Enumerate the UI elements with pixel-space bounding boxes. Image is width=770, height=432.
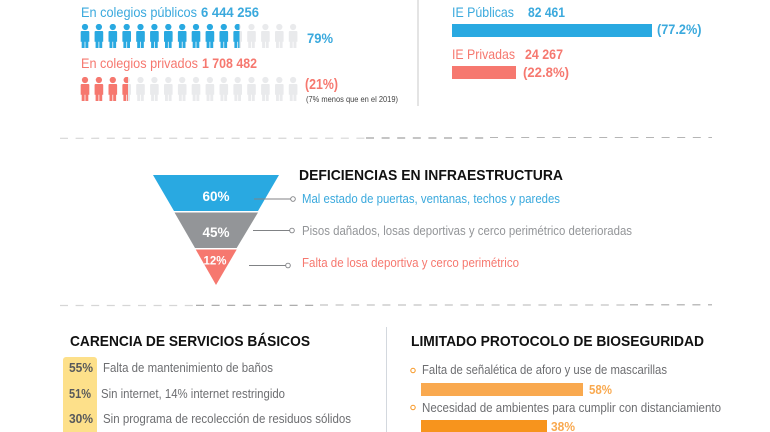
label: private institutions: 24 267 (525, 47, 563, 62)
bar: private institutions (452, 66, 516, 79)
panel: students by school type (81, 5, 398, 104)
pictogram: public schools 79% (81, 24, 297, 48)
value: 21%: (21%) (305, 77, 338, 93)
funnel segment: 45%: 45% (202, 225, 230, 240)
funnel segment: 12%: 12% (203, 256, 227, 268)
label: private schools students: 1 708 482 (202, 56, 257, 72)
label: private schools students: En colegios privados (81, 56, 198, 72)
highlight column (63, 357, 97, 432)
label: public schools students: 6 444 256 (201, 5, 259, 21)
item: distancing: Necesidad de ambientes para cumplir con distanciamiento (422, 400, 721, 415)
value: 79%: 79% (307, 30, 334, 46)
funnel segment: 60%: 60% (202, 189, 230, 204)
heading: infrastructure deficiencies: DEFICIENCIAS EN INFRAESTRUCTURA (299, 167, 563, 184)
label: private institutions: IE Privadas (452, 47, 515, 62)
panel: basic services (63, 333, 351, 432)
callout: 45%: Pisos dañados, losas deportivas y cerco perimétrico deterioradas (302, 223, 632, 238)
heading: limited biosecurity protocol: LIMITADO PROTOCOLO DE BIOSEGURIDAD (411, 333, 704, 350)
panel: educational institutions (452, 5, 702, 80)
label: public institutions (452, 5, 565, 20)
bar: 58% (421, 382, 613, 397)
label: public institutions: IE Públicas (452, 5, 514, 20)
item: bathrooms 55%: 55% (69, 360, 94, 375)
bar: public institutions (452, 24, 652, 37)
pictogram: private schools 21% (81, 77, 297, 101)
heading: lack of basic services: CARENCIA DE SERVICIOS BÁSICOS (70, 333, 310, 350)
item: waste 30%: 30% (69, 411, 94, 426)
label: private institutions (452, 47, 563, 62)
panel: biosecurity (411, 333, 721, 432)
note: compared to 2019: (7% menos que en el 2019) (306, 95, 398, 104)
item: internet 51%: Sin internet, 14% internet restringido (101, 386, 285, 401)
funnel chart (153, 175, 279, 285)
value: 22.8%: (22.8%) (523, 65, 569, 80)
item: internet 51%: 51% (69, 386, 92, 401)
bar: 58%: 58% (589, 382, 613, 397)
item: signage: Falta de señalética de aforo y use de mascarillas (422, 362, 667, 377)
item: waste 30%: Sin programa de recolección de residuos sólidos (103, 411, 351, 426)
item: bathrooms 55%: Falta de mantenimiento de baños (103, 360, 273, 375)
value: 77.2%: (77.2%) (657, 22, 702, 37)
bar: 38% (421, 419, 576, 432)
callout: 60%: Mal estado de puertas, ventanas, techos y paredes (302, 191, 560, 206)
label: public institutions: 82 461 (528, 5, 565, 20)
callout: 12%: Falta de losa deportiva y cerco perimétrico (302, 255, 519, 270)
label: public schools students: En colegios públicos (81, 5, 197, 21)
